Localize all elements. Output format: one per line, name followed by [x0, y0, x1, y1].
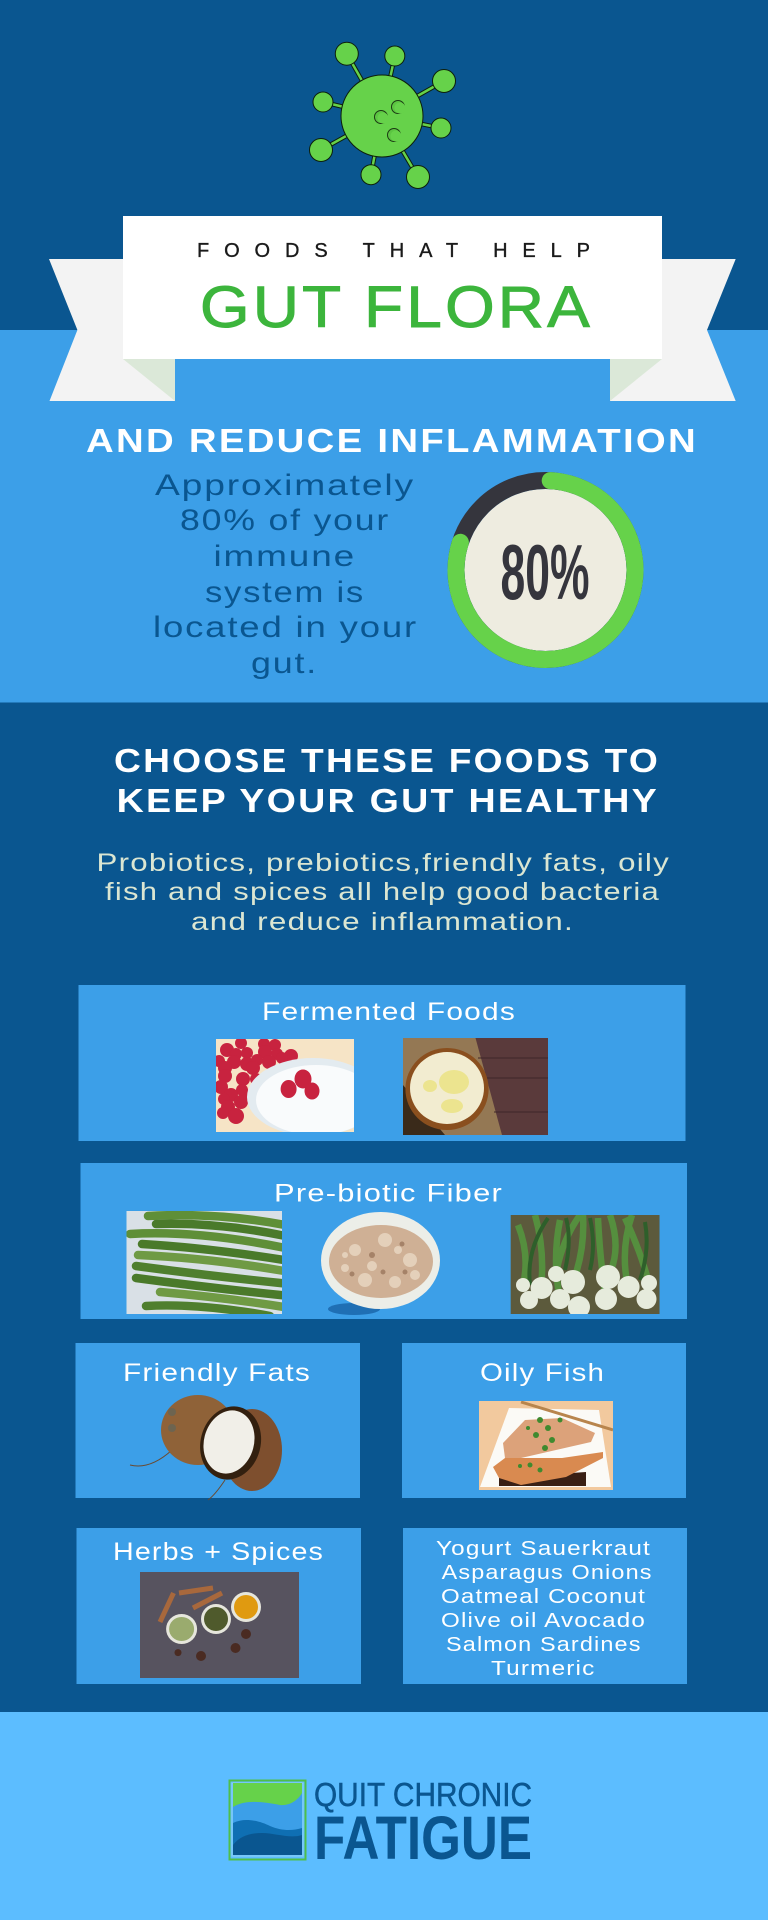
section description: and reduce inflammation. — [191, 908, 574, 936]
heading: friendly fats: Friendly Fats — [123, 1359, 311, 1387]
panel: pre-biotic fiber — [80, 1163, 687, 1319]
background: light blue section — [0, 330, 768, 702]
panel: herbs and spices — [76, 1528, 361, 1684]
eyebrow title: FOODS THAT HELP — [197, 240, 590, 262]
logo: Quit Chronic Fatigue: FATIGUE — [314, 1804, 532, 1872]
text block: immune system statement: located in your — [153, 611, 418, 644]
donut value: 80% — [500, 528, 590, 616]
subtitle: AND REDUCE INFLAMMATION — [86, 423, 698, 460]
food list text: Turmeric — [491, 1657, 596, 1680]
ribbon right fold — [610, 359, 662, 401]
ribbon left fold — [123, 359, 175, 401]
image: oatmeal bowl — [321, 1212, 440, 1315]
text block: immune system statement: system is — [205, 576, 365, 609]
text block: immune system statement: immune — [214, 540, 356, 573]
ribbon left tail — [49, 259, 175, 401]
food list text: Salmon Sardines — [446, 1633, 642, 1656]
heading: herbs and spices: Herbs + Spices — [113, 1538, 324, 1566]
panel: friendly fats — [76, 1343, 360, 1500]
image: salmon steaks — [479, 1401, 613, 1490]
section description: Probiotics, prebiotics,friendly fats, oily — [96, 849, 670, 877]
section heading: KEEP YOUR GUT HEALTHY — [117, 783, 659, 820]
heading: oily fish: Oily Fish — [480, 1359, 605, 1387]
image: spring onions — [511, 1215, 660, 1318]
image: spices on slate — [140, 1572, 299, 1678]
ribbon banner — [49, 216, 736, 401]
food list text: Olive oil Avocado — [441, 1609, 646, 1632]
ribbon right tail — [610, 259, 736, 401]
main title: GUT FLORA — [200, 275, 593, 340]
text block: immune system statement — [153, 469, 418, 680]
section description: fish and spices all help good bacteria — [105, 878, 660, 906]
food list text: Yogurt Sauerkraut — [436, 1537, 651, 1560]
food list text: Asparagus Onions — [442, 1561, 653, 1584]
text block: immune system statement: 80% of your — [180, 504, 390, 537]
food list text: Oatmeal Coconut — [441, 1585, 646, 1608]
panel: oily fish — [402, 1343, 686, 1498]
panel: fermented foods — [78, 985, 686, 1141]
text block: immune system statement: Approximately — [155, 469, 415, 502]
image: sauerkraut in wooden bowl — [403, 1038, 548, 1135]
logo mark — [230, 1780, 306, 1860]
section description — [96, 849, 670, 936]
chart: 80% donut — [456, 480, 635, 660]
icon: green bacterium — [310, 42, 456, 189]
image: asparagus — [126, 1211, 290, 1316]
text block: immune system statement: gut. — [251, 647, 318, 680]
section heading: CHOOSE THESE FOODS TO — [114, 743, 660, 780]
food list text — [436, 1537, 653, 1680]
ribbon centre — [123, 216, 662, 359]
heading: fermented foods: Fermented Foods — [262, 998, 516, 1026]
logo wordmark: QUIT CHRONIC — [314, 1776, 532, 1813]
section heading — [114, 743, 660, 820]
background: top dark band — [0, 0, 768, 330]
image: yogurt with raspberries — [216, 1039, 354, 1132]
background: dark food section — [0, 702, 768, 1712]
image: coconut — [130, 1395, 282, 1500]
logo: Quit Chronic Fatigue — [228, 1780, 532, 1860]
panel: food list — [403, 1528, 687, 1684]
heading: pre-biotic fiber: Pre-biotic Fiber — [274, 1180, 503, 1208]
background: footer band — [0, 1712, 768, 1920]
